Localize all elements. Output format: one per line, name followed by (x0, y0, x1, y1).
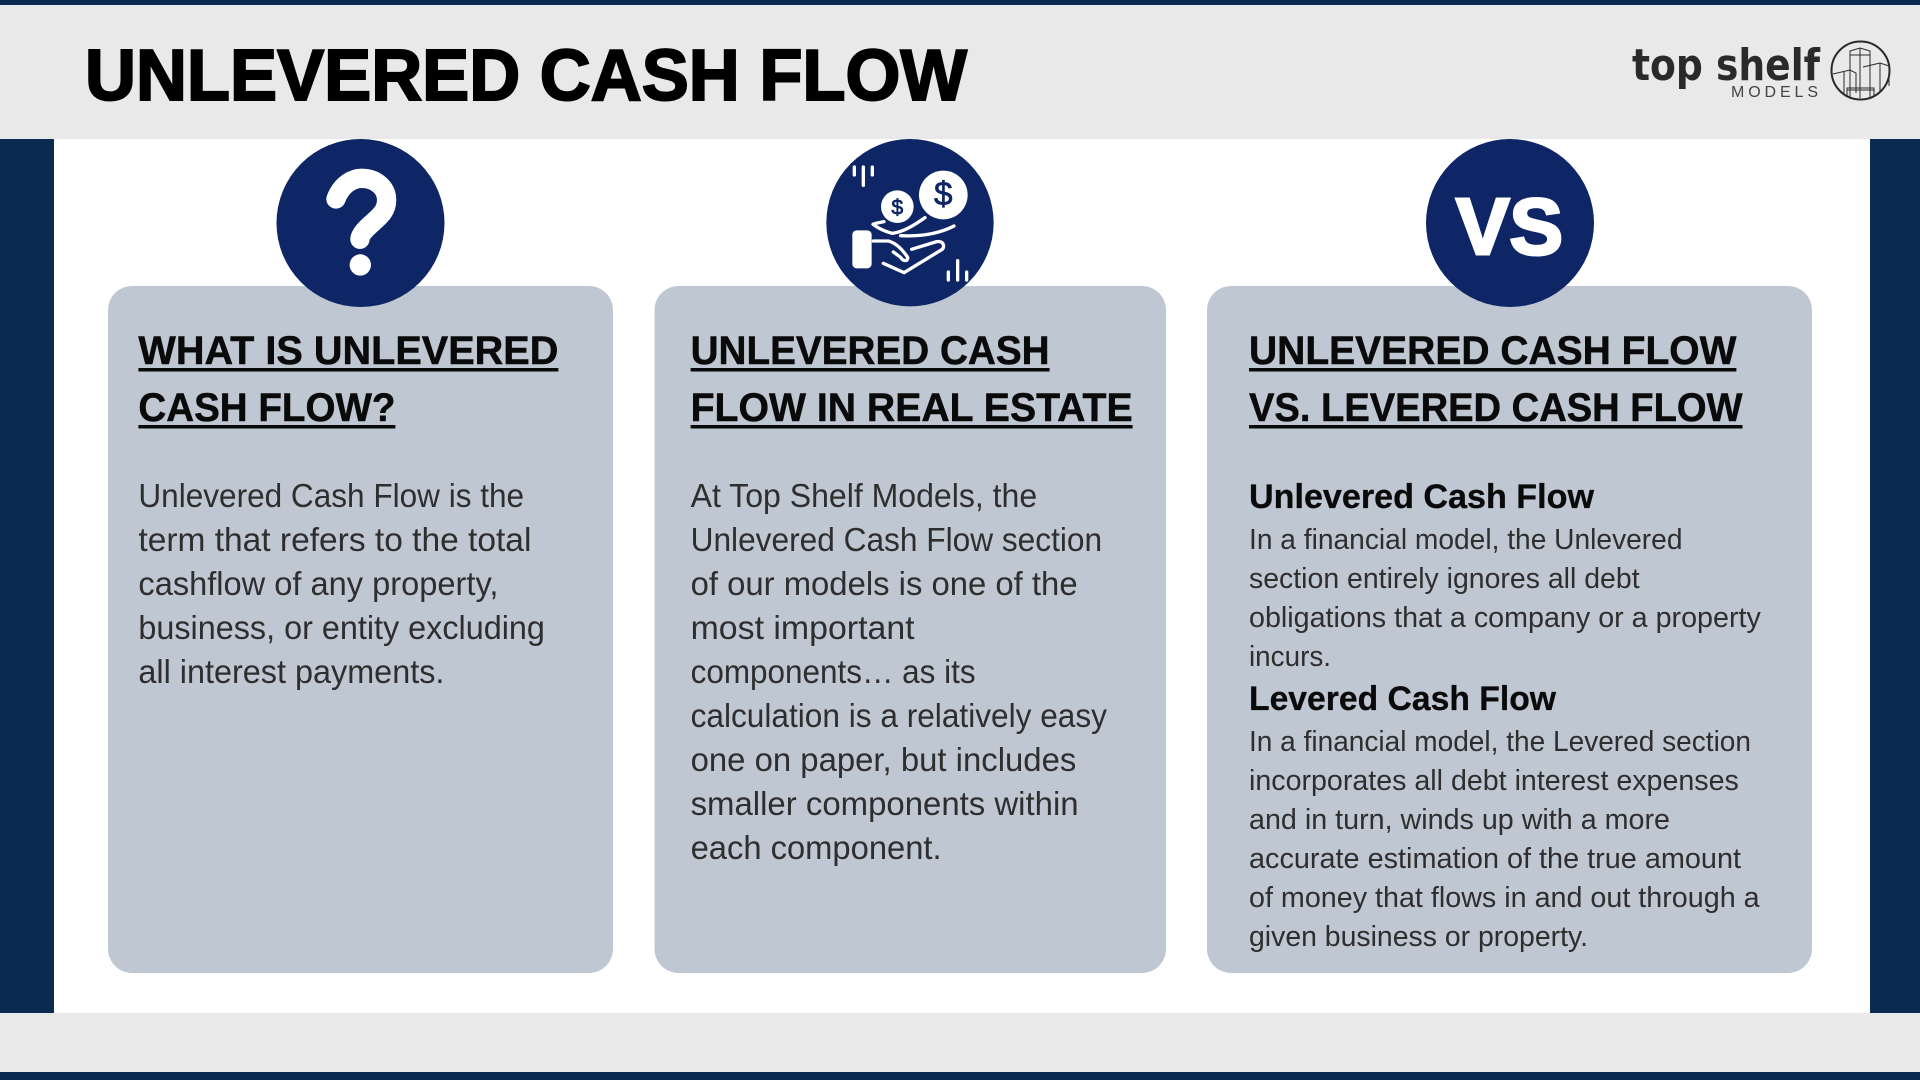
subsection: unlevered cash flow: obligations that a company or a property (1249, 602, 1762, 634)
body text: definition: all interest payments. (138, 653, 444, 690)
heading: what is unlevered cash flow: CASH FLOW? (138, 386, 395, 430)
icon: hand with coins: $ (891, 195, 903, 219)
body text: top shelf models: most important (691, 609, 915, 646)
icon: VS (1426, 139, 1594, 307)
body text: top shelf models: each component. (691, 829, 942, 866)
subsection: unlevered cash flow: incurs. (1249, 641, 1331, 673)
heading: what is unlevered cash flow (138, 329, 558, 430)
subsection: unlevered cash flow (1249, 478, 1762, 673)
body text: top shelf models: calculation is a relatively easy (691, 697, 1107, 734)
logo: top shelf models: top shelf (1632, 40, 1821, 91)
subsection: levered cash flow: of money that flows in and out through a (1249, 882, 1760, 914)
panel: unlevered vs levered cash flow (1207, 286, 1812, 973)
logo: top shelf models: MODELS (1731, 84, 1818, 101)
title: UNLEVERED CASH FLOW (85, 36, 967, 116)
header band (0, 5, 1920, 139)
heading: in real estate: FLOW IN REAL ESTATE (691, 386, 1133, 430)
subsection: levered cash flow: and in turn, winds up with a more (1249, 804, 1670, 836)
body text: definition: Unlevered Cash Flow is the (138, 477, 524, 514)
icon: question mark (276, 139, 444, 307)
heading: what is unlevered cash flow: WHAT IS UNLEVERED (138, 329, 558, 373)
body text: definition (138, 477, 545, 690)
subsection: levered cash flow: incorporates all debt interest expenses (1249, 765, 1739, 797)
icon: hand with coins: $ (934, 176, 953, 213)
body text: definition: cashflow of any property, (138, 565, 498, 602)
body text: top shelf models: At Top Shelf Models, the (691, 477, 1037, 514)
subsection: unlevered cash flow: In a financial model, the Unlevered (1249, 524, 1682, 556)
subsection: levered cash flow: given business or property. (1249, 921, 1588, 953)
heading: in real estate (691, 329, 1133, 430)
body text: definition: business, or entity excluding (138, 609, 545, 646)
body text: definition: term that refers to the total (138, 521, 531, 558)
body text: top shelf models (691, 477, 1107, 866)
heading: unlevered vs levered (1249, 329, 1743, 430)
body text: top shelf models: smaller components within (691, 785, 1079, 822)
heading: in real estate: UNLEVERED CASH (691, 329, 1050, 373)
panel: what is unlevered cash flow (108, 286, 613, 973)
panel: unlevered cash flow in real estate (654, 286, 1166, 973)
body text: top shelf models: Unlevered Cash Flow section (691, 521, 1102, 558)
heading: unlevered vs levered: VS. LEVERED CASH FLOW (1249, 386, 1743, 430)
icon: hand with coins (826, 139, 994, 306)
subsection: levered cash flow: accurate estimation of the true amount (1249, 843, 1741, 875)
subsection: levered cash flow: Levered Cash Flow (1249, 680, 1557, 718)
body text: top shelf models: of our models is one of the (691, 565, 1078, 602)
subsection: levered cash flow: In a financial model, the Levered section (1249, 726, 1751, 758)
subsection: unlevered cash flow: Unlevered Cash Flow (1249, 478, 1595, 516)
body text: top shelf models: components… as its (691, 653, 976, 690)
icon: VS: VS (1456, 182, 1563, 271)
body text: top shelf models: one on paper, but includes (691, 741, 1076, 778)
heading: unlevered vs levered: UNLEVERED CASH FLOW (1249, 329, 1737, 373)
subsection: unlevered cash flow: section entirely ignores all debt (1249, 563, 1640, 595)
subsection: levered cash flow (1249, 680, 1760, 953)
